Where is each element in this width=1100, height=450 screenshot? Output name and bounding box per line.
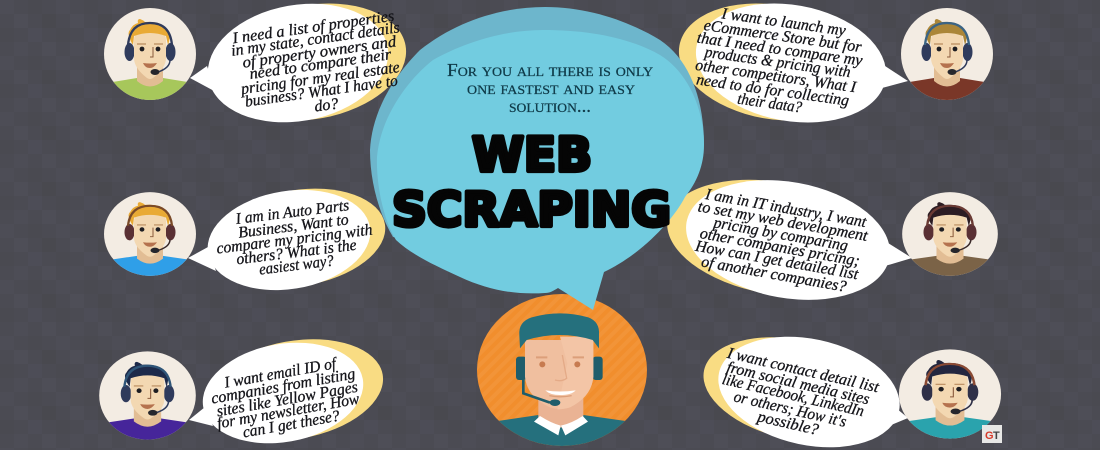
text: middle right question: of another companies? — [700, 253, 848, 296]
text: top right question: I want to launch my — [720, 5, 848, 40]
face highlight — [557, 337, 593, 409]
title — [392, 128, 671, 238]
text: top left question: need to compare their — [248, 46, 393, 83]
text: middle left question: I am in Auto Parts — [234, 197, 350, 228]
text: middle right question — [693, 186, 869, 296]
bubble shape: top left — [190, 0, 415, 136]
eyes and brows — [536, 357, 584, 367]
text: bottom right question: like Facebook, LinkedIn — [720, 371, 866, 420]
text: middle right question: I am in IT industry, I want — [703, 186, 868, 231]
text: top right question: products & pricing with — [703, 44, 852, 81]
text: top left question: do? — [313, 95, 339, 116]
text: middle right question: pricing by comparing — [711, 214, 849, 255]
bubble shape: top right — [670, 0, 908, 137]
text: bottom right question — [720, 345, 881, 439]
text: bottom left question — [210, 355, 361, 441]
text: middle left question: compare my pricing with — [216, 222, 373, 258]
shirt — [498, 415, 625, 446]
bubble body and tail — [377, 30, 704, 310]
text: top left question: business? What I have to — [244, 72, 399, 111]
intro text — [447, 60, 654, 116]
bubble shape: bottom right — [694, 321, 910, 450]
intro text: one fastest and easy — [467, 78, 636, 98]
avatar: middle right person — [902, 192, 998, 276]
text: top left question: in my state, contact details — [230, 19, 401, 60]
text: middle right question: How can I get detailed list — [693, 238, 860, 283]
bubble shadow shell — [370, 7, 704, 250]
bubble shape: middle right — [658, 164, 912, 315]
text: bottom right question: I want contact detail list — [725, 345, 881, 396]
text: bottom right question: or others; How it's — [732, 388, 848, 431]
text: top right question: need to do for collecting — [695, 71, 850, 110]
text: top right question — [694, 5, 864, 116]
text: middle left question — [216, 197, 373, 279]
GT logo badge: T — [993, 430, 1000, 442]
GT logo badge — [982, 425, 1002, 443]
hair — [519, 313, 599, 348]
bubble shape: middle left — [188, 177, 392, 301]
text: bottom left question: can I get these? — [241, 408, 341, 441]
neck — [538, 397, 583, 427]
text: middle right question: to set my web development — [697, 198, 869, 245]
text: bottom left question: for my newsletter, How — [216, 391, 361, 432]
central agent avatar — [477, 294, 647, 450]
text: top right question: their data? — [736, 91, 803, 116]
avatar: top left person — [104, 8, 196, 100]
text: middle right question: other companies pricing; — [699, 225, 861, 270]
GT logo badge: G — [985, 430, 994, 442]
bubble shape: bottom left — [189, 326, 391, 450]
text: bottom left question: I want email ID of — [222, 355, 340, 392]
headset cups — [516, 357, 603, 380]
title: SCRAPING — [392, 183, 671, 238]
text: bottom left question: companies from listing — [210, 366, 357, 408]
avatar: middle left person — [104, 192, 196, 276]
text: bottom right question: possible? — [755, 408, 820, 439]
text: middle left question: others? What is the — [235, 237, 358, 268]
intro text: For you all there is only — [447, 60, 654, 80]
text: top right question: eCommerce Store but for — [703, 17, 863, 56]
text: top right question: other competitors, What I — [694, 57, 858, 96]
collar — [534, 416, 588, 435]
text: middle left question: easiest way? — [258, 253, 335, 279]
text: top left question: I need a list of properties — [230, 8, 395, 47]
text: bottom right question: from social media sites — [725, 359, 871, 408]
orange circle — [477, 294, 647, 446]
avatar: top right person — [901, 8, 993, 100]
text: top left question — [230, 8, 401, 116]
intro text: solution... — [509, 96, 591, 116]
text: middle left question: Business, Want to — [237, 211, 350, 242]
text: top left question: of property owners and — [241, 33, 398, 72]
central speech bubble — [370, 7, 704, 310]
nose and smile — [545, 355, 576, 397]
microphone — [523, 380, 560, 406]
text: top right question: that I need to compare my — [696, 30, 864, 70]
face — [525, 340, 593, 409]
text: bottom left question: sites like Yellow Pages — [215, 379, 359, 420]
title: WEB — [472, 128, 592, 183]
avatar: bottom right person — [898, 349, 1002, 439]
avatar: bottom left person — [99, 351, 196, 440]
text: top left question: pricing for my real estate — [239, 59, 401, 98]
